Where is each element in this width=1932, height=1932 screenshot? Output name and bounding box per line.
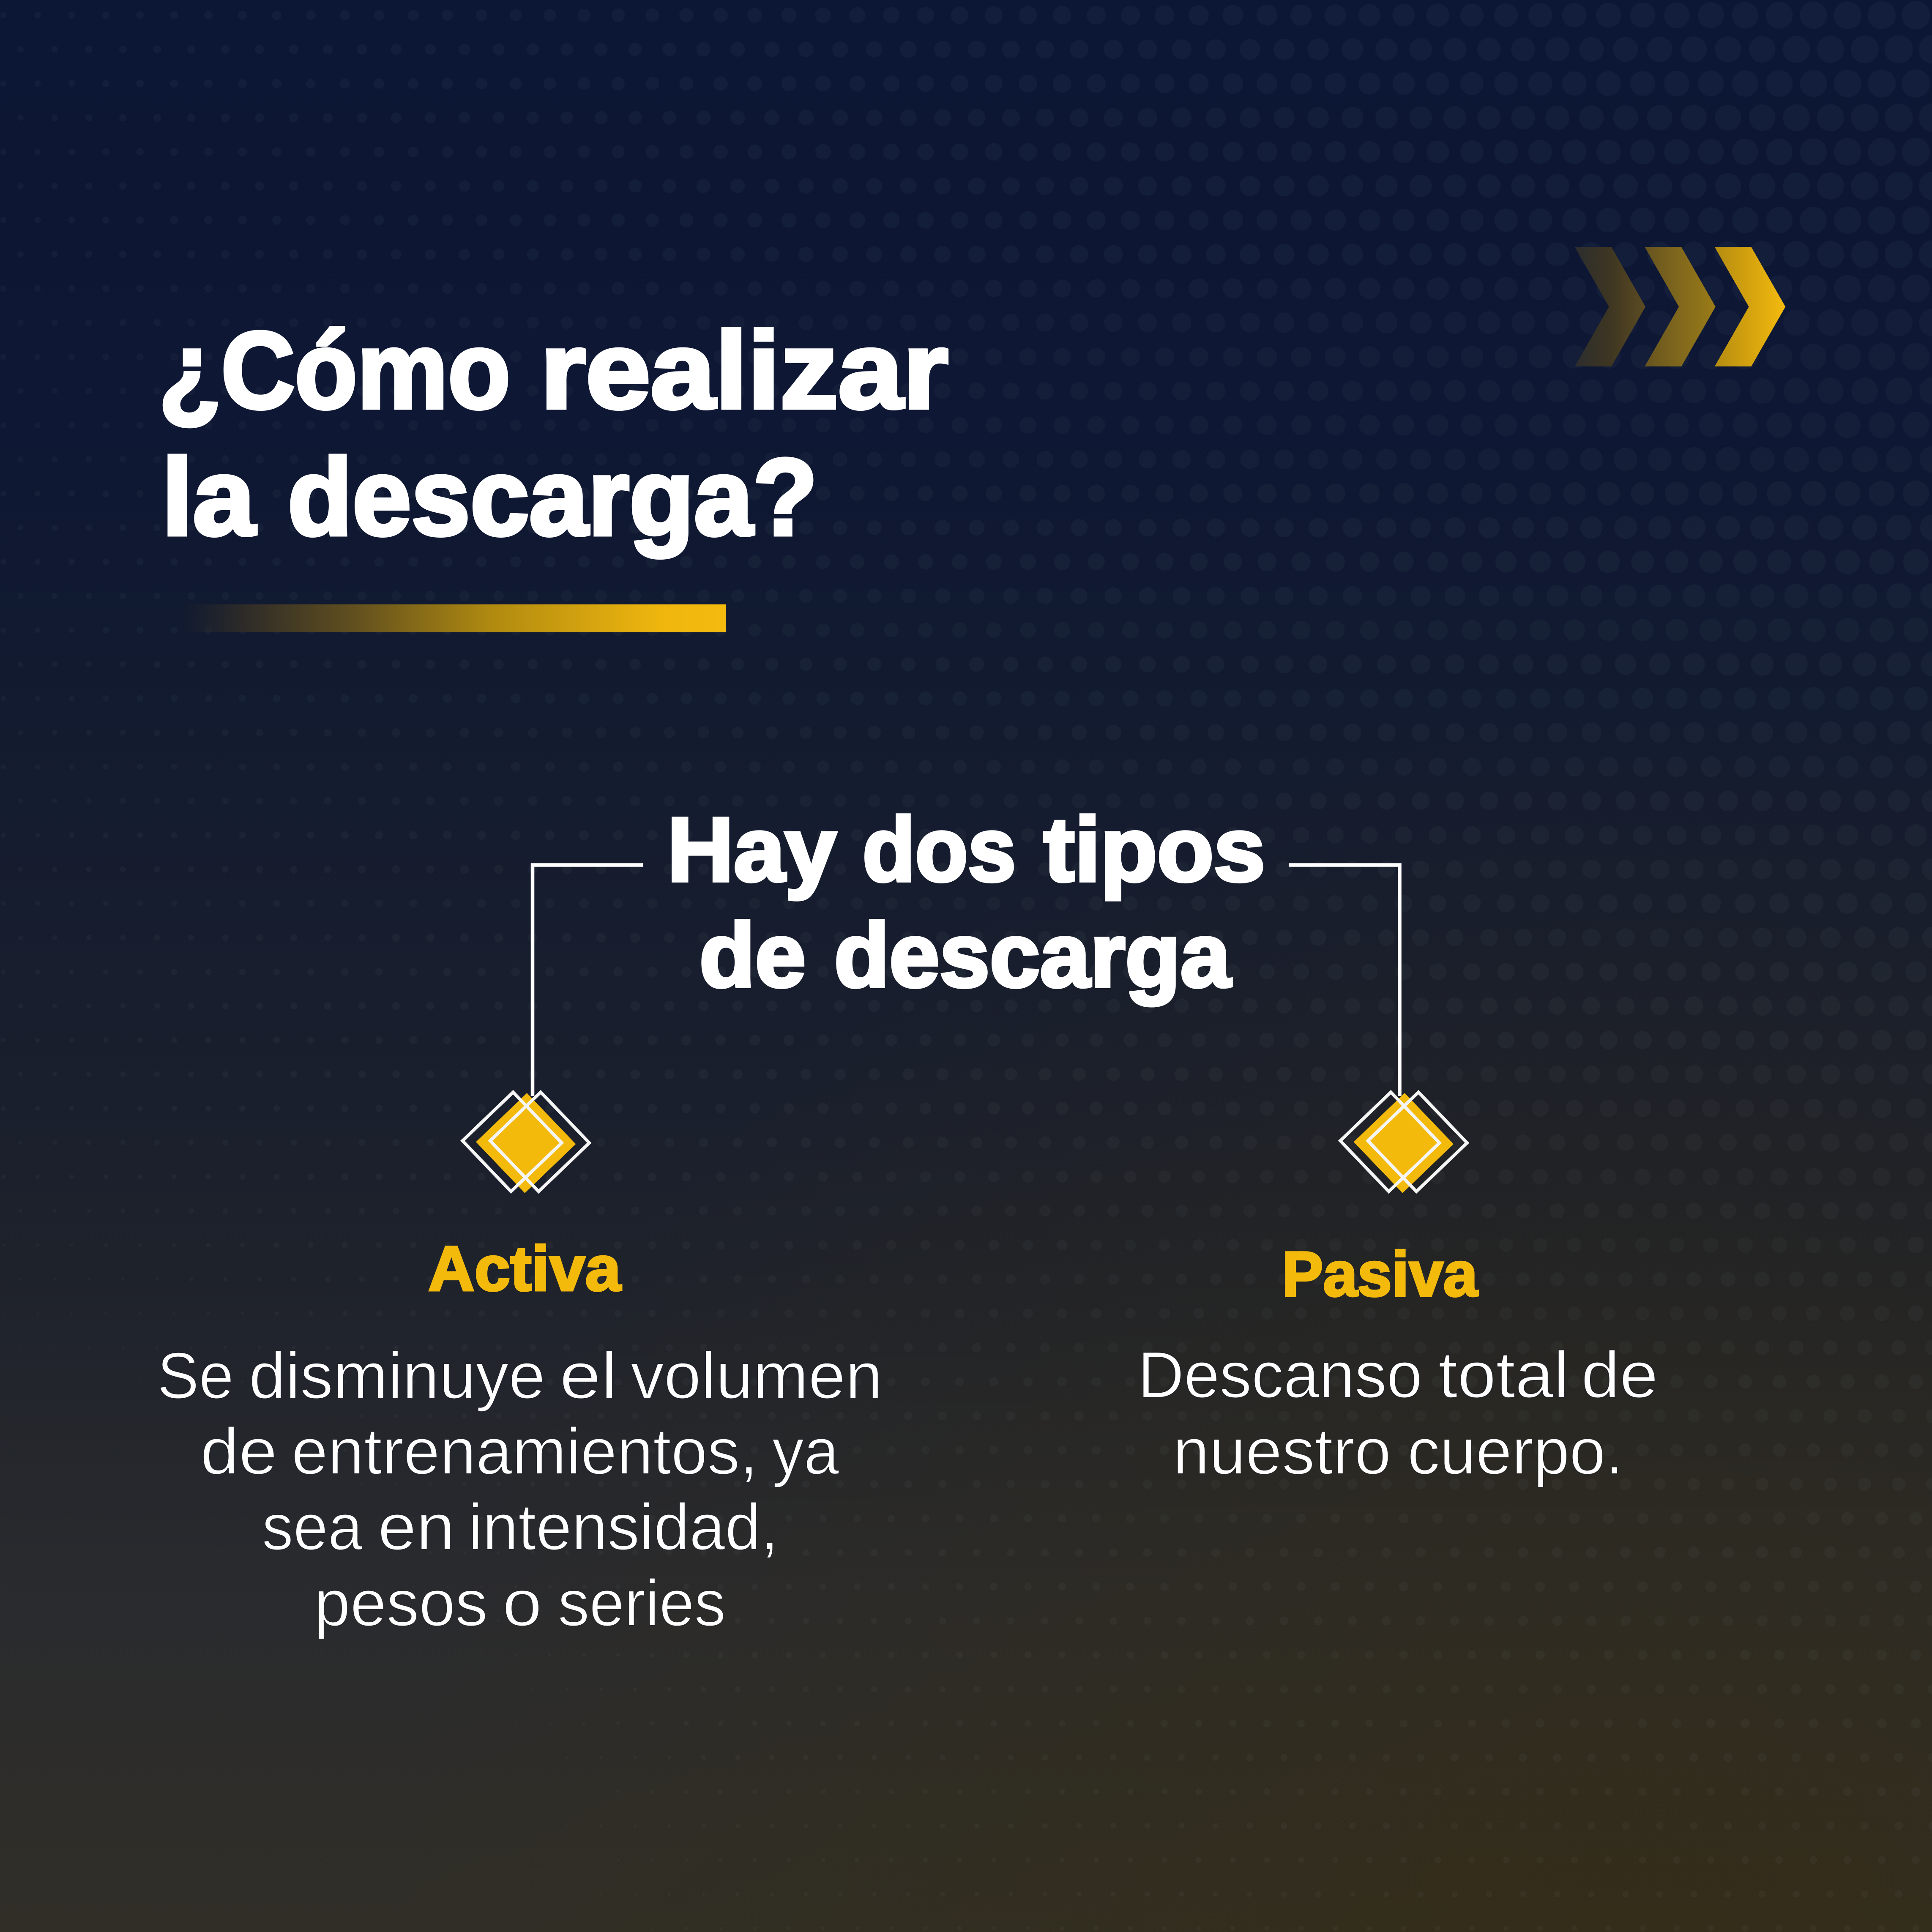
title: descarga? [287, 436, 817, 558]
icon: Pasiva diamond [1340, 1092, 1467, 1193]
text block: Pasiva description [1138, 1338, 1658, 1488]
text block: Activa description: Se [157, 1339, 234, 1412]
connector line to Pasiva [1289, 865, 1400, 1096]
text block: Activa description: disminuye [249, 1339, 545, 1412]
text block: Activa description: sea [262, 1490, 363, 1563]
subtitle: tipos [1044, 798, 1265, 900]
connector line to Activa [533, 865, 643, 1096]
title underline bar [182, 604, 726, 632]
text block: Activa description: el [560, 1339, 618, 1412]
text block: Activa description: pesos [314, 1566, 488, 1640]
subtitle: descarga [834, 904, 1231, 1006]
text block: Pasiva description: total [1438, 1338, 1569, 1411]
icon: triple chevron arrows [1575, 247, 1785, 366]
text block: Pasiva description: de [1581, 1338, 1658, 1411]
subtitle: Hay [667, 798, 836, 900]
subtitle [667, 798, 1265, 1006]
heading: Pasiva: Pasiva [1282, 1238, 1478, 1309]
text block: Activa description: intensidad, [468, 1490, 779, 1563]
text block: Activa description [157, 1339, 883, 1640]
title: realizar [540, 309, 948, 431]
text block: Pasiva description: Descanso [1138, 1338, 1422, 1411]
title: ¿Cómo [159, 309, 511, 431]
text block: Pasiva description: nuestro [1173, 1415, 1391, 1488]
text block: Activa description: ya [772, 1415, 839, 1488]
text block: Activa description: entrenamientos, [292, 1415, 758, 1488]
subtitle: de [699, 904, 806, 1006]
heading: Activa: Activa [428, 1233, 622, 1304]
text block: Activa description: volumen [631, 1339, 883, 1412]
subtitle: dos [862, 798, 1016, 900]
text block: Pasiva description: cuerpo. [1407, 1415, 1623, 1488]
title: la [161, 436, 256, 558]
text block: Activa description: o [503, 1566, 542, 1640]
title [159, 309, 948, 558]
text block: Activa description: en [378, 1490, 455, 1563]
text block: Activa description: de [200, 1415, 277, 1488]
icon: Activa diamond [462, 1092, 589, 1193]
text block: Activa description: series [558, 1566, 726, 1640]
